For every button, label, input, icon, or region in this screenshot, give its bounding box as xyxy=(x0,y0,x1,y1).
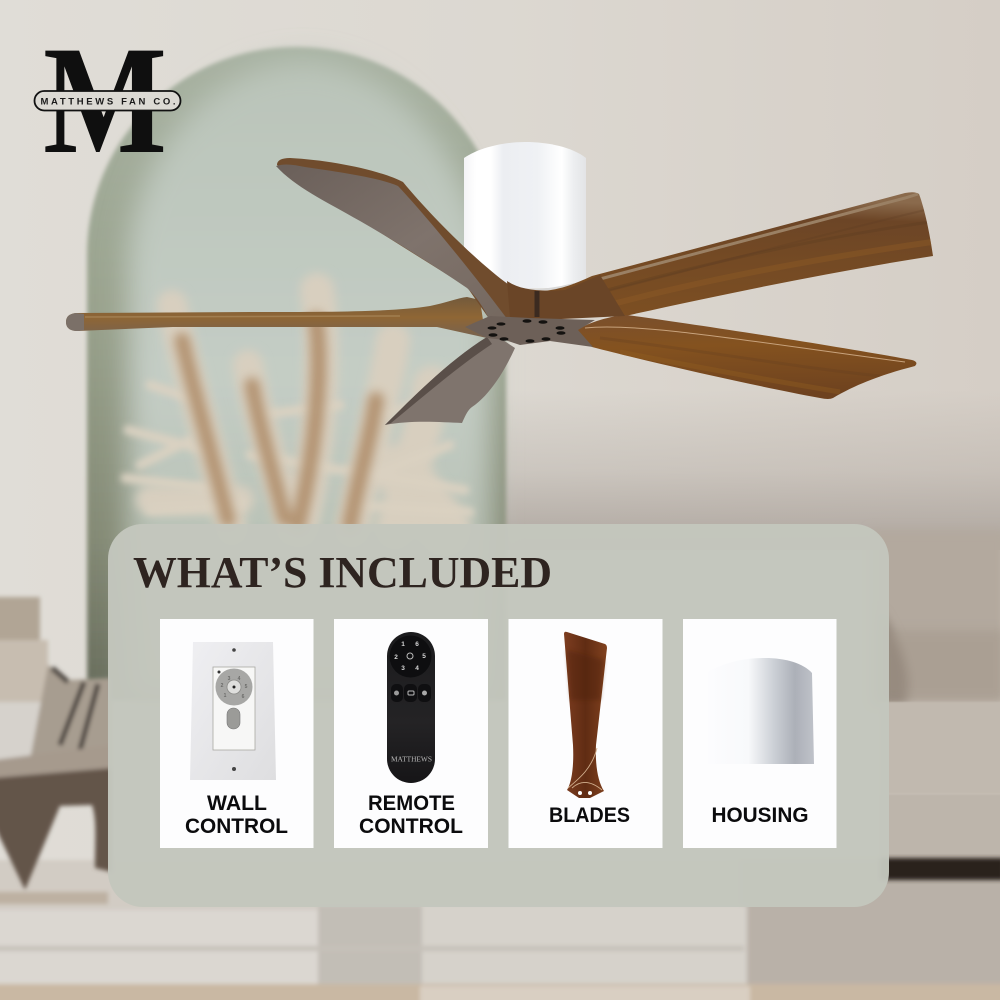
icon: remote: 2 xyxy=(394,654,398,661)
icon: wall plate: 2 xyxy=(221,683,224,689)
icon: remote: 1 xyxy=(401,641,405,648)
icon: remote: 4 xyxy=(415,665,419,672)
icon: wall plate xyxy=(190,642,276,780)
icon: blade xyxy=(564,632,607,798)
label: remote control: REMOTE xyxy=(368,792,455,815)
icon: housing xyxy=(708,658,814,764)
icon: wall plate: 6 xyxy=(242,694,245,700)
label: wall control: CONTROL xyxy=(185,815,288,838)
ceiling fan xyxy=(66,142,933,425)
blade: upper left xyxy=(276,158,530,322)
fan housing xyxy=(464,142,586,290)
card: remote control xyxy=(334,619,488,848)
logo: Matthews Fan Co.: M xyxy=(43,15,167,187)
label: blades: BLADES xyxy=(549,803,630,827)
label: wall control: WALL xyxy=(207,792,267,815)
blade: left xyxy=(66,297,487,338)
wood hub xyxy=(507,275,625,320)
icon: remote: 6 xyxy=(415,641,419,648)
blade: lower left xyxy=(385,337,515,425)
background: pampas grass xyxy=(125,290,470,530)
label: housing: HOUSING xyxy=(712,803,808,827)
icon: remote: 5 xyxy=(422,653,426,660)
icon: remote xyxy=(387,632,435,783)
icon: remote: 3 xyxy=(401,665,405,672)
icon: wall plate: 4 xyxy=(238,676,241,682)
heading: WHAT’S INCLUDED xyxy=(133,548,552,597)
blade: lower right xyxy=(577,315,916,399)
background: armchair with throw xyxy=(0,597,112,904)
blade: upper right xyxy=(535,192,933,318)
background: floor xyxy=(0,860,1000,1000)
label: remote control: CONTROL xyxy=(359,815,463,838)
metal hub plate xyxy=(465,316,595,347)
icon: wall plate: 1 xyxy=(224,693,227,699)
card: blades xyxy=(508,619,662,848)
background: sofa xyxy=(870,530,1000,880)
icon: wall plate: 5 xyxy=(245,684,248,690)
card: housing xyxy=(683,619,836,848)
card: wall control xyxy=(160,619,314,848)
icon: wall plate: 3 xyxy=(228,676,231,682)
logo: Matthews Fan Co.: MATTHEWS FAN CO. xyxy=(40,96,176,107)
background: arched green niche xyxy=(87,47,506,700)
panel: what's included xyxy=(108,524,889,907)
icon: remote: MATTHEWS xyxy=(391,756,432,764)
